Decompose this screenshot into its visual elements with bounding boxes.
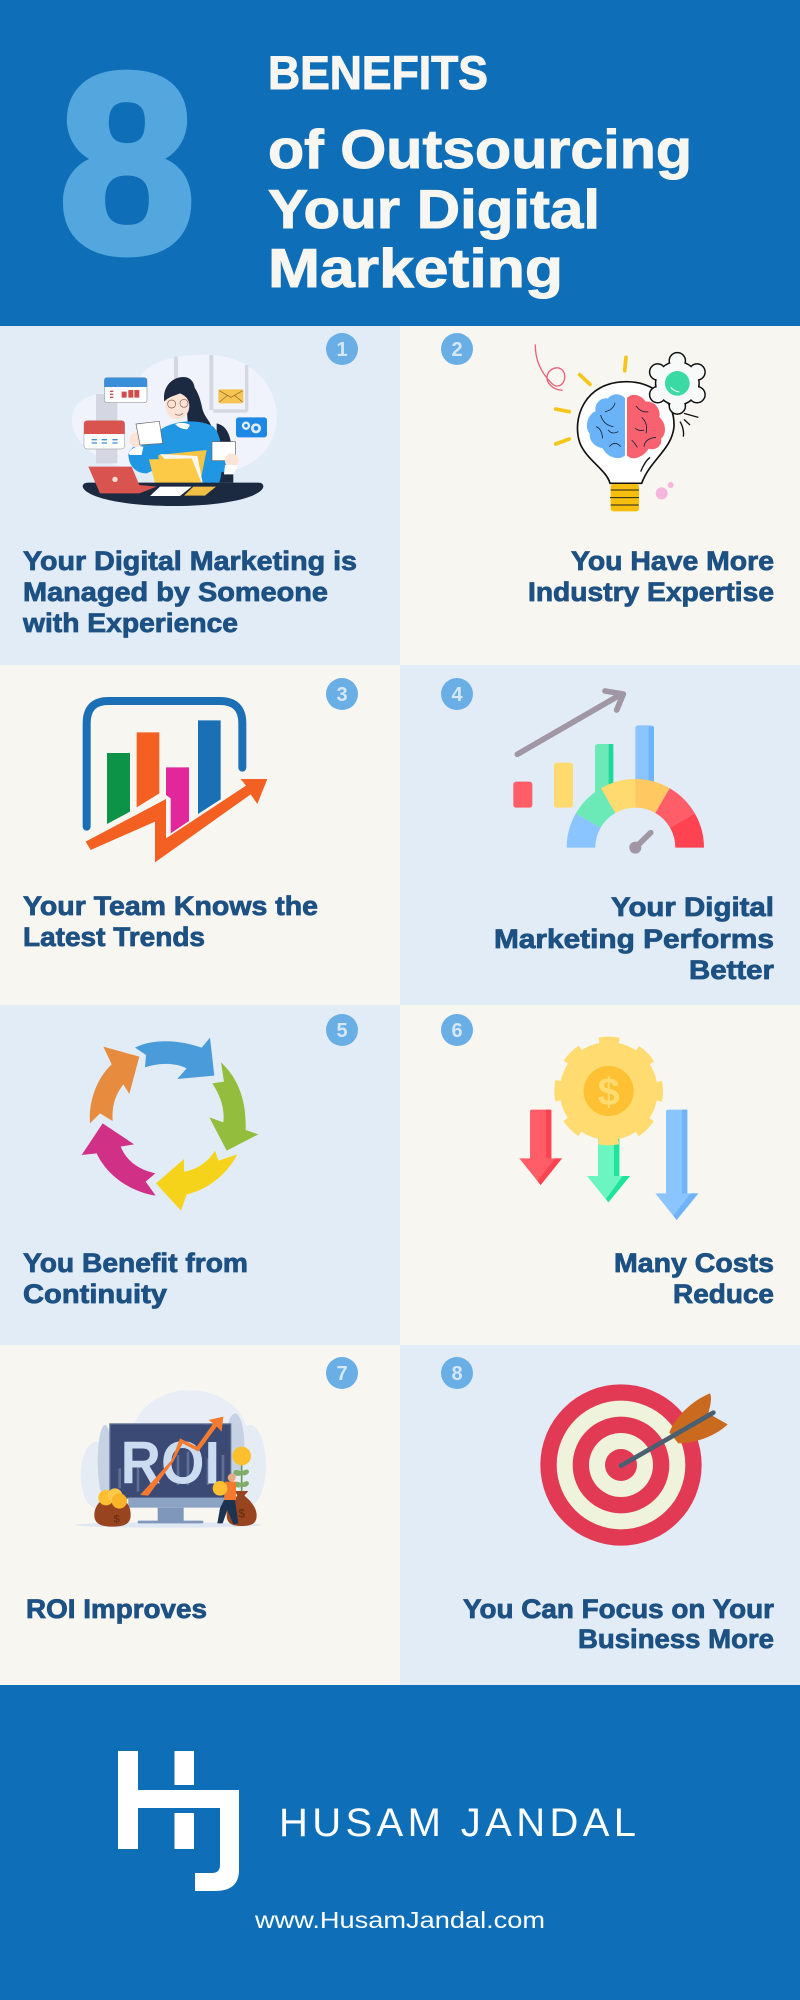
logo: HJ monogram xyxy=(118,1751,239,1891)
heading 4: Marketing Performs xyxy=(494,924,774,954)
heading 2: Industry Expertise xyxy=(528,577,774,607)
heading 1: Managed by Someone xyxy=(23,577,328,607)
icon: woman at desk xyxy=(72,355,277,506)
badge 7: 7 xyxy=(336,1363,348,1385)
brand name: HUSAM JANDAL xyxy=(279,1801,636,1845)
heading 8: You Can Focus on Your xyxy=(463,1594,775,1624)
icon: rising bars and speed gauge xyxy=(513,691,704,854)
badge 6 xyxy=(441,1014,473,1046)
icon: ROI monitor with money bags xyxy=(75,1390,266,1528)
icon: ROI monitor with money bags: ROI xyxy=(121,1428,220,1496)
heading 8: Business More xyxy=(578,1624,774,1654)
icon: target with arrow xyxy=(540,1384,728,1546)
badge 8 xyxy=(441,1357,473,1389)
heading 6: Many Costs xyxy=(614,1248,774,1278)
heading 5: Continuity xyxy=(23,1279,167,1309)
heading 3: Latest Trends xyxy=(23,922,205,952)
icon: bar chart with zigzag arrow xyxy=(86,701,267,862)
icon: ROI monitor with money bags: $ xyxy=(114,1513,121,1525)
badge 8: 8 xyxy=(451,1363,463,1385)
heading 3: Your Team Knows the xyxy=(23,891,318,921)
header banner xyxy=(0,0,800,326)
heading 6: Reduce xyxy=(673,1279,774,1309)
website: www.HusamJandal.com xyxy=(254,1907,545,1933)
heading 5: You Benefit from xyxy=(23,1248,248,1278)
heading 1: with Experience xyxy=(22,608,238,638)
heading 2 xyxy=(528,546,774,607)
icon: dollar gear and down arrows: $ xyxy=(598,1070,620,1114)
panel 3: team knows latest trends xyxy=(0,665,400,1005)
title xyxy=(268,46,692,299)
badge 4 xyxy=(441,678,473,710)
badge 6: 6 xyxy=(451,1020,463,1042)
heading 1 xyxy=(22,546,357,638)
heading 2: You Have More xyxy=(571,546,774,576)
panel 7: ROI improves xyxy=(0,1345,400,1685)
panel 2: more industry expertise xyxy=(400,326,800,665)
heading 3 xyxy=(23,891,318,952)
badge 3: 3 xyxy=(336,684,348,706)
title: BENEFITS xyxy=(268,46,488,99)
heading 5 xyxy=(23,1248,248,1309)
title: Your Digital xyxy=(268,178,600,240)
icon: ROI monitor with money bags: $ xyxy=(238,1507,245,1521)
badge 2: 2 xyxy=(451,339,463,361)
heading 4: Better xyxy=(689,955,775,985)
heading 4: Your Digital xyxy=(611,892,774,922)
panel 4: digital marketing performs better xyxy=(400,665,800,1005)
heading 7: ROI Improves xyxy=(26,1594,207,1624)
footer xyxy=(0,1685,800,2000)
badge 3 xyxy=(326,678,358,710)
big number 8: 8 xyxy=(59,21,195,305)
badge 5 xyxy=(326,1014,358,1046)
badge 7 xyxy=(326,1357,358,1389)
title: Marketing xyxy=(268,237,563,299)
badge 2 xyxy=(441,333,473,365)
icon: dollar gear and down arrows xyxy=(519,1040,698,1220)
panel 5: benefit from continuity xyxy=(0,1005,400,1345)
badge 1: 1 xyxy=(336,339,348,361)
title: of Outsourcing xyxy=(268,118,692,180)
heading 8 xyxy=(463,1594,775,1654)
heading 6 xyxy=(614,1248,774,1309)
icon: light bulb with brain and gear xyxy=(535,344,705,511)
badge 1 xyxy=(326,333,358,365)
icon: circular arrows xyxy=(82,1038,258,1211)
heading 4 xyxy=(494,892,775,985)
badge 5: 5 xyxy=(336,1020,348,1042)
heading 1: Your Digital Marketing is xyxy=(23,546,357,576)
panel 6: many costs reduce xyxy=(400,1005,800,1345)
panel 8: focus on your business xyxy=(400,1345,800,1685)
panel 1: managed by someone with experience xyxy=(0,326,400,665)
badge 4: 4 xyxy=(451,684,463,706)
